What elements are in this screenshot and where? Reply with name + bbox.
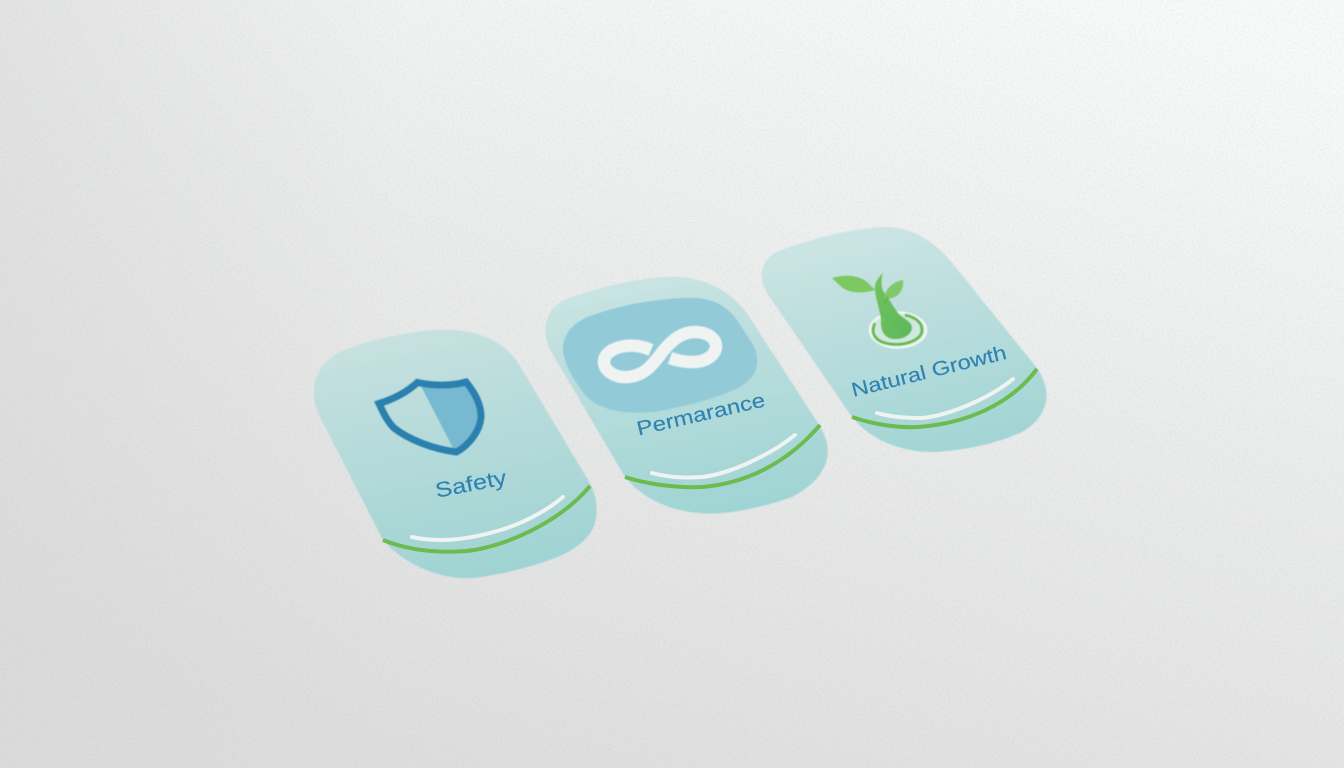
card body: safety [314,330,597,578]
icon: shield [379,382,481,452]
accent: white arc [412,497,563,540]
card body: natural growth [762,227,1047,452]
right leaf [885,280,903,299]
accent: white arc [652,435,795,478]
left leaf [832,276,875,292]
card body: permanence [545,277,828,513]
panel: permanence card [545,277,828,513]
label: safety: Safety [433,466,509,503]
stem and bulb [875,273,912,339]
accent: green arc [383,486,590,552]
icon tile: rounded square [563,298,757,413]
label: natural growth: Natural Growth [849,342,1009,402]
icon: sprout [832,273,926,348]
accent: green arc [852,369,1037,427]
ring [870,312,926,348]
panel: safety card [314,330,597,578]
panel: natural growth card [762,227,1047,452]
accent: green arc [625,425,820,487]
accent: white arc [877,379,1013,418]
icon: infinity [604,332,716,377]
label: permarance: Permarance [635,390,767,440]
